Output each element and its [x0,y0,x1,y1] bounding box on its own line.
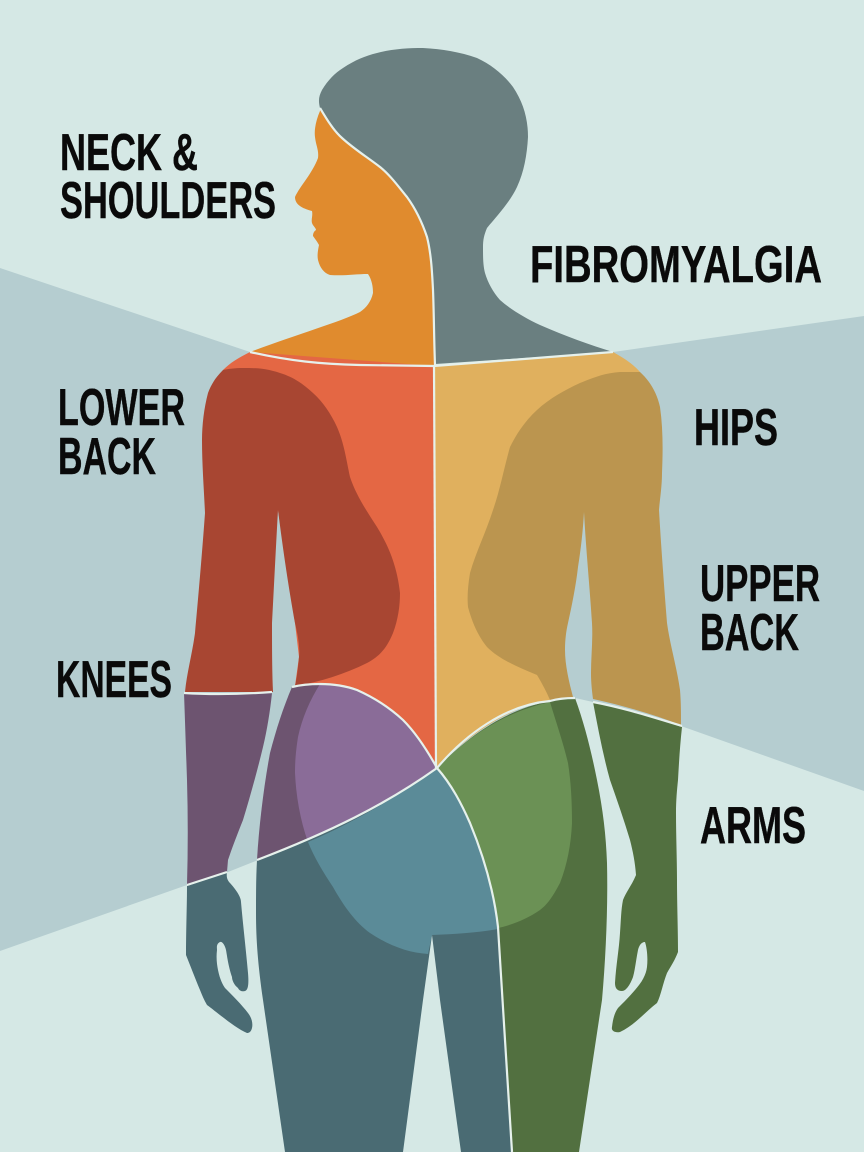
label: neck and shoulders: NECK & [60,124,198,182]
segment: lower leg highlight [308,768,498,954]
label: lower back [58,379,185,486]
label: neck and shoulders: SHOULDERS [60,172,276,230]
label: knees: KNEES [56,651,172,709]
label: lower back: LOWER [58,379,185,437]
segment: leg left and hand [256,768,512,1152]
label: arms: ARMS [700,797,806,855]
segment: head and fibromyalgia [319,48,613,364]
label: upper back: BACK [700,604,799,662]
segment: right forearm and hand [593,702,682,1032]
segment: knees highlight [295,684,437,842]
body figure [184,48,682,1152]
segment: left hand [186,872,252,1033]
label: neck and shoulders [60,124,276,230]
segment: knees [257,684,437,860]
segment: torso left [223,352,437,768]
segment: forearm left [184,693,272,885]
background band [0,268,864,951]
segment: white divider lines [184,108,682,1152]
segment: green hip highlight [437,702,572,928]
segment: torso right [434,352,640,768]
segment: neck and shoulders [250,108,435,365]
segment: hips overlay [468,372,681,725]
segment: lower back arm [185,368,400,692]
label: hips: HIPS [694,399,778,457]
label: lower back: BACK [58,428,156,486]
label: upper back [700,555,820,662]
segment: green leg [437,698,607,1152]
